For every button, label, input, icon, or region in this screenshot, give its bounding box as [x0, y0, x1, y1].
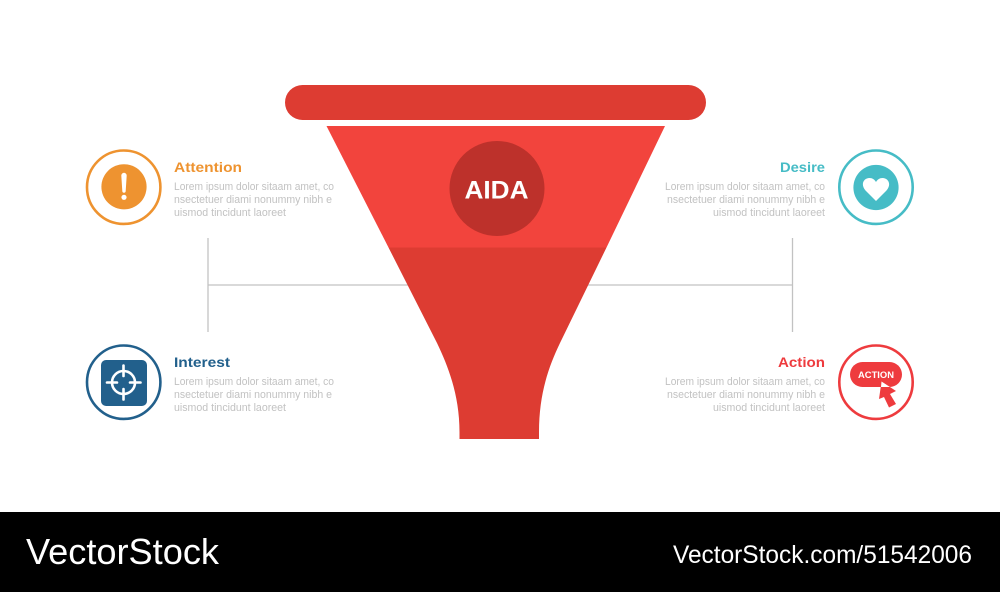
text block: desire: uismod tincidunt laoreet	[713, 207, 825, 219]
icon: action	[839, 346, 913, 419]
funnel rim	[285, 85, 706, 120]
icon: attention	[87, 150, 160, 224]
AIDA badge	[450, 141, 544, 236]
text block: desire: nsectetuer diami nonummy nibh e	[667, 194, 825, 206]
text block: attention: Lorem ipsum dolor sitaam amet, co	[174, 181, 334, 193]
text block: interest: uismod tincidunt laoreet	[174, 402, 286, 414]
AIDA badge: AIDA	[464, 176, 528, 204]
text block: action: uismod tincidunt laoreet	[713, 402, 825, 414]
text block: attention: uismod tincidunt laoreet	[174, 207, 286, 219]
text block: desire: Lorem ipsum dolor sitaam amet, co	[665, 181, 825, 193]
text block: attention: nsectetuer diami nonummy nibh e	[174, 194, 332, 206]
funnel upper section	[326, 126, 665, 248]
text block: action: nsectetuer diami nonummy nibh e	[667, 389, 825, 401]
text block: attention	[174, 160, 334, 219]
text block: interest: nsectetuer diami nonummy nibh e	[174, 389, 332, 401]
funnel	[285, 85, 706, 439]
text block: desire: Desire	[780, 160, 826, 175]
text block: action: Action	[778, 355, 825, 370]
icon: interest	[87, 346, 160, 419]
footer brand: VectorStock	[26, 531, 220, 572]
text block: interest: Lorem ipsum dolor sitaam amet, co	[174, 376, 334, 388]
text block: action: Lorem ipsum dolor sitaam amet, co	[665, 376, 825, 388]
text block: interest: Interest	[174, 355, 231, 370]
icon: desire	[839, 150, 913, 224]
funnel lower section	[388, 248, 606, 439]
watermark footer bar	[0, 512, 1000, 592]
text block: action	[665, 355, 825, 414]
footer image id: VectorStock.com/51542006	[673, 541, 972, 569]
icon: action: ACTION	[858, 370, 894, 380]
text block: interest	[174, 355, 334, 414]
text block: attention: Attention	[174, 160, 242, 175]
text block: desire	[665, 160, 826, 219]
